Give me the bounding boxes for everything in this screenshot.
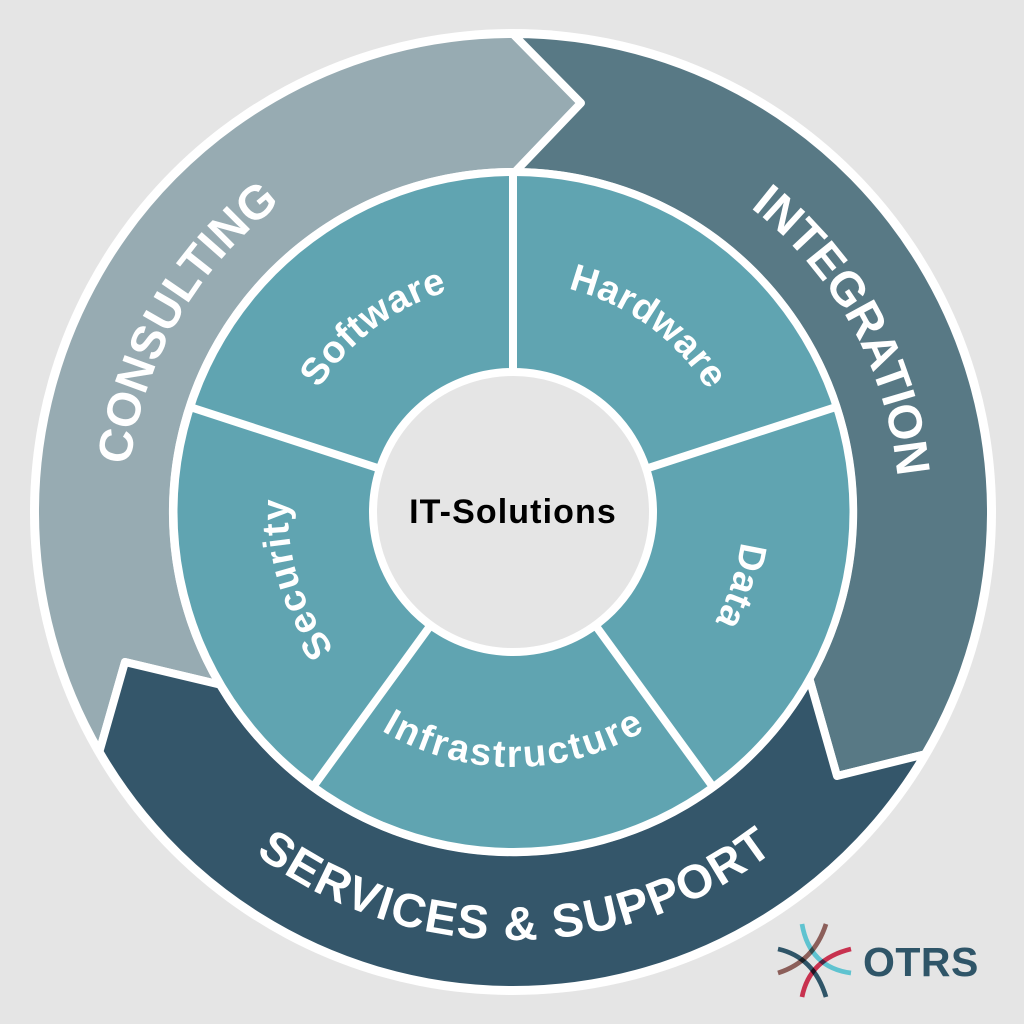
centre title: IT-Solutions [409, 493, 617, 531]
label: data: Data [716, 544, 766, 626]
label: software: Software [302, 274, 444, 384]
label: services and support: SERVICES & SUPPORT [260, 825, 766, 940]
label: integration: INTEGRATION [752, 184, 930, 474]
inner wheel [169, 168, 857, 856]
label: infrastructure: Infrastructure [384, 709, 642, 767]
arrow: integration [513, 34, 991, 776]
arrow: services and support [99, 662, 925, 990]
label: security: Security [262, 500, 330, 660]
logo: OTRS [778, 924, 979, 997]
segment dividers [190, 172, 836, 787]
logo wordmark: OTRS [863, 939, 979, 985]
label: hardware: Hardware [570, 264, 721, 386]
label: consulting: CONSULTING [99, 184, 276, 461]
logo mark [778, 924, 851, 997]
arrow: consulting [35, 34, 581, 752]
centre circle [373, 372, 653, 652]
